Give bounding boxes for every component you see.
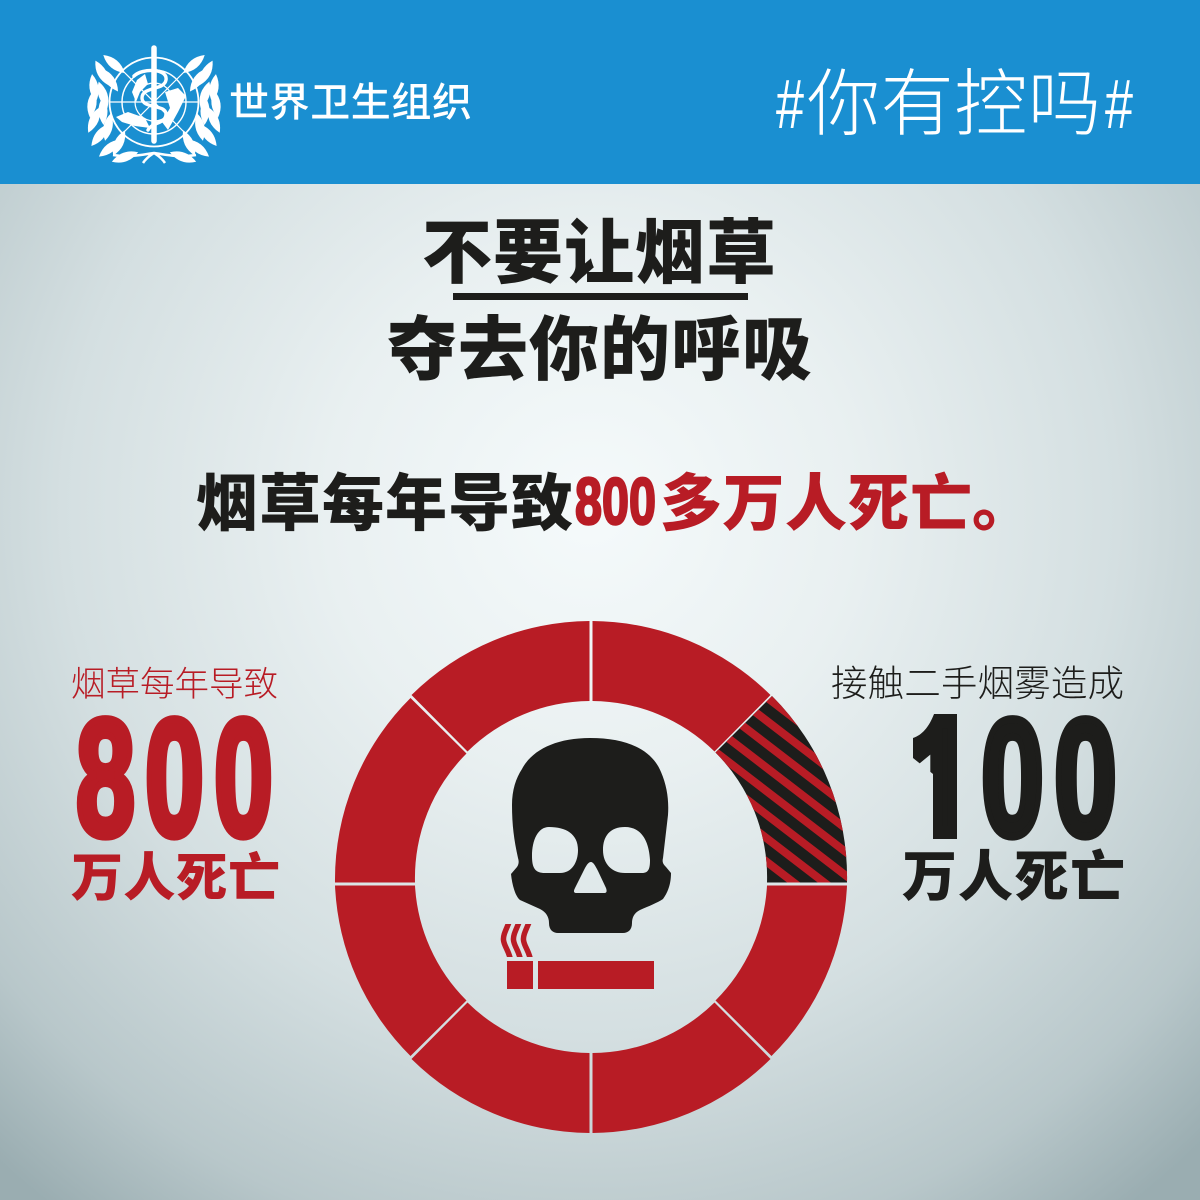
right statistic: 1 million: 接触二手烟雾造成: [831, 655, 1124, 707]
title underline: [453, 293, 748, 300]
smoke: [503, 920, 530, 960]
segments: tobacco deaths: [335, 621, 847, 1133]
icon: skull: [511, 738, 671, 933]
hashtag: #: [1105, 65, 1133, 143]
donut chart: [335, 621, 860, 1133]
organisation name: 世界卫生组织: [229, 70, 472, 128]
title: 不要让烟草: [422, 197, 776, 298]
headline statistic: 800: [575, 464, 656, 538]
left statistic: 8 million: 万人死亡: [71, 836, 280, 911]
left statistic: 8 million: [71, 656, 280, 911]
icon: WHO emblem: [84, 48, 224, 166]
big number 100: 0: [1054, 686, 1117, 871]
headline statistic: [196, 453, 1034, 543]
header band: [0, 0, 1200, 184]
hashtag: #: [776, 65, 804, 143]
headline statistic: 。: [972, 453, 1034, 543]
headline statistic: 多万人死亡: [660, 453, 972, 543]
hashtag: 你有控吗: [807, 45, 1101, 151]
big number 100: 1: [907, 686, 977, 871]
title: [387, 197, 812, 395]
left statistic: 8 million: 烟草每年导致: [71, 656, 278, 706]
big number 100: 0: [981, 686, 1044, 871]
big number 100: [913, 714, 1116, 841]
big number 800: 0: [214, 686, 273, 871]
hatched segment: second-hand smoke: [716, 696, 848, 882]
wreath: [84, 52, 224, 166]
right statistic: 1 million: [831, 655, 1125, 912]
headline statistic: 烟草每年导致: [196, 453, 573, 543]
icon: cigarette: [503, 920, 654, 989]
big number 800: 8: [76, 686, 135, 871]
right statistic: 1 million: 万人死亡: [902, 832, 1125, 912]
title: 夺去你的呼吸: [387, 294, 812, 395]
big number 800: 0: [145, 686, 204, 871]
big number 800: [76, 686, 273, 871]
